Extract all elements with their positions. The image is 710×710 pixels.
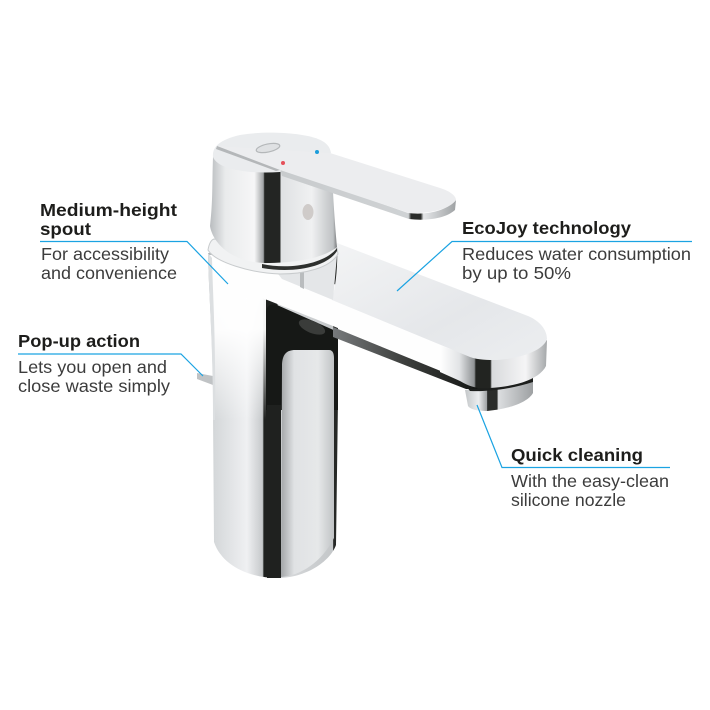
heading: Pop-up action <box>18 331 140 351</box>
description second line: by up to 50% <box>462 263 571 283</box>
description: For accessibility <box>41 244 169 264</box>
column cavity <box>266 304 338 410</box>
lever top <box>217 146 456 213</box>
hot indicator <box>281 161 285 165</box>
cartridge hole <box>302 204 314 220</box>
cold indicator <box>315 150 319 154</box>
cavity pipe detail <box>297 316 327 338</box>
neck behind cartridge <box>275 255 337 300</box>
faucet column <box>208 250 338 578</box>
callout: quick cleaning <box>477 405 670 510</box>
lever side edge <box>280 168 456 220</box>
heading: EcoJoy technology <box>462 218 631 238</box>
leader line <box>477 405 670 468</box>
callout: pop-up action <box>18 331 203 396</box>
callout: EcoJoy technology <box>397 218 692 291</box>
handle cartridge <box>210 157 337 263</box>
faucet illustration <box>197 133 547 578</box>
description: Lets you open and <box>18 357 167 377</box>
pop-up lever pin <box>197 373 213 385</box>
lever highlight strip <box>216 146 280 171</box>
spout top plate <box>332 243 547 360</box>
leader line <box>40 242 228 284</box>
heading second line: spout <box>40 219 91 239</box>
brand badge <box>255 142 281 154</box>
leader line <box>18 354 203 376</box>
collar ring <box>208 239 338 274</box>
leader line <box>397 242 692 291</box>
aerator nozzle <box>465 380 533 411</box>
spout front face <box>440 340 547 388</box>
description second line: close waste simply <box>18 376 170 396</box>
heading: Medium-height <box>40 200 177 220</box>
description: With the easy-clean <box>511 471 669 491</box>
spout white arm <box>225 258 480 379</box>
upper column left shading <box>208 253 215 420</box>
handle top disc <box>213 133 331 172</box>
lower dark stripe <box>267 405 281 578</box>
spout underside shadow <box>333 327 478 389</box>
description second line: silicone nozzle <box>511 490 626 510</box>
callout: medium-height spout <box>40 200 228 284</box>
cavity reflection <box>281 350 334 577</box>
nozzle shadow line <box>466 378 533 391</box>
collar shadow <box>262 248 337 270</box>
description second line: and convenience <box>41 263 177 283</box>
column upper highlight <box>209 255 266 420</box>
neck reflection <box>300 270 304 289</box>
description: Reduces water consumption <box>462 244 691 264</box>
heading: Quick cleaning <box>511 445 643 465</box>
